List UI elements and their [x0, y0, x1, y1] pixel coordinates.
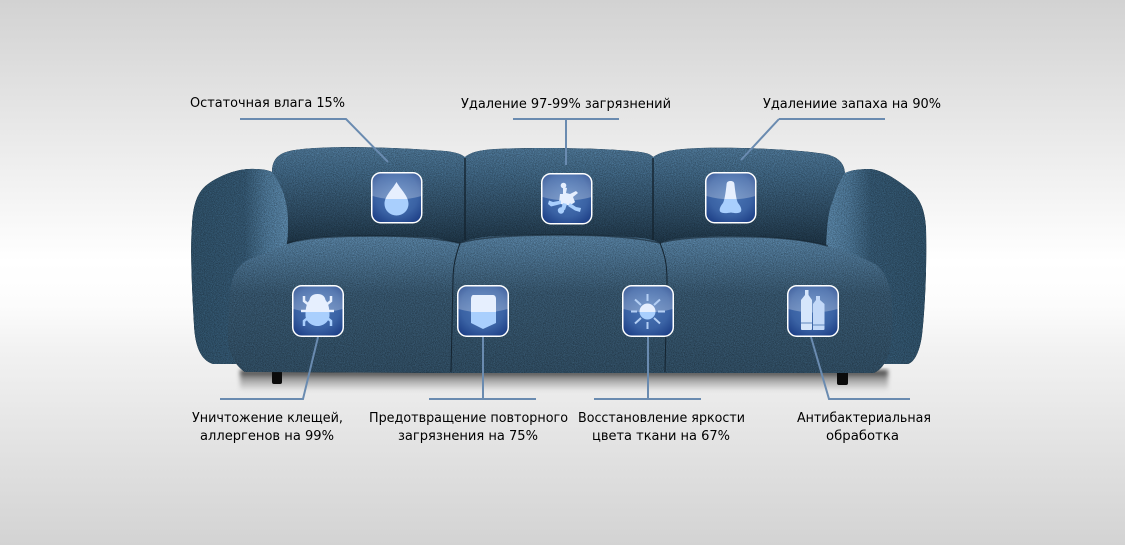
line: mites — [220, 337, 318, 399]
left armrest — [191, 169, 288, 364]
labels — [190, 96, 941, 444]
label: colour brightness: Восстановление яркости — [578, 411, 745, 426]
back cushion left — [272, 147, 466, 250]
label: mites and allergens: Уничтожение клещей, — [192, 411, 343, 426]
line: antibacterial — [811, 337, 910, 399]
back cushion middle — [464, 148, 654, 250]
label: re-soiling prevention: загрязнения на 75% — [398, 429, 538, 444]
line: residual moisture — [240, 119, 388, 162]
seat cushion middle — [451, 235, 667, 373]
label: re-soiling prevention: Предотвращение повторного — [369, 411, 568, 426]
sofa legs — [272, 370, 848, 385]
label: dirt removal: Удаление 97-99% загрязнений — [461, 97, 671, 112]
back cushion right — [652, 148, 845, 250]
label: mites and allergens: аллергенов на 99% — [200, 429, 334, 444]
callout lines — [220, 119, 910, 399]
line: odor removal — [741, 119, 885, 160]
label: residual moisture: Остаточная влага 15% — [190, 96, 345, 111]
label: antibacterial treatment: Антибактериальная — [797, 411, 931, 426]
seat cushion left — [228, 236, 460, 373]
cushion seams — [288, 158, 828, 372]
line: colour brightness — [594, 337, 701, 399]
icon: sun — [623, 286, 673, 336]
icon: bug — [293, 286, 343, 336]
line: re-soiling — [429, 337, 536, 399]
label: colour brightness: цвета ткани на 67% — [592, 429, 730, 444]
icon: shield — [458, 286, 508, 336]
sofa shadow — [240, 370, 888, 391]
icon: nose — [706, 173, 756, 223]
seat cushion right — [660, 236, 892, 373]
icon: stain splash — [542, 174, 592, 224]
label: odor removal: Удалениие запаха на 90% — [763, 97, 941, 112]
right armrest — [826, 169, 926, 364]
sofa — [191, 147, 926, 373]
label: antibacterial treatment: обработка — [826, 429, 899, 444]
line: dirt removal — [513, 119, 619, 165]
icon: bottles — [788, 286, 838, 336]
icon: water drop — [372, 173, 422, 223]
